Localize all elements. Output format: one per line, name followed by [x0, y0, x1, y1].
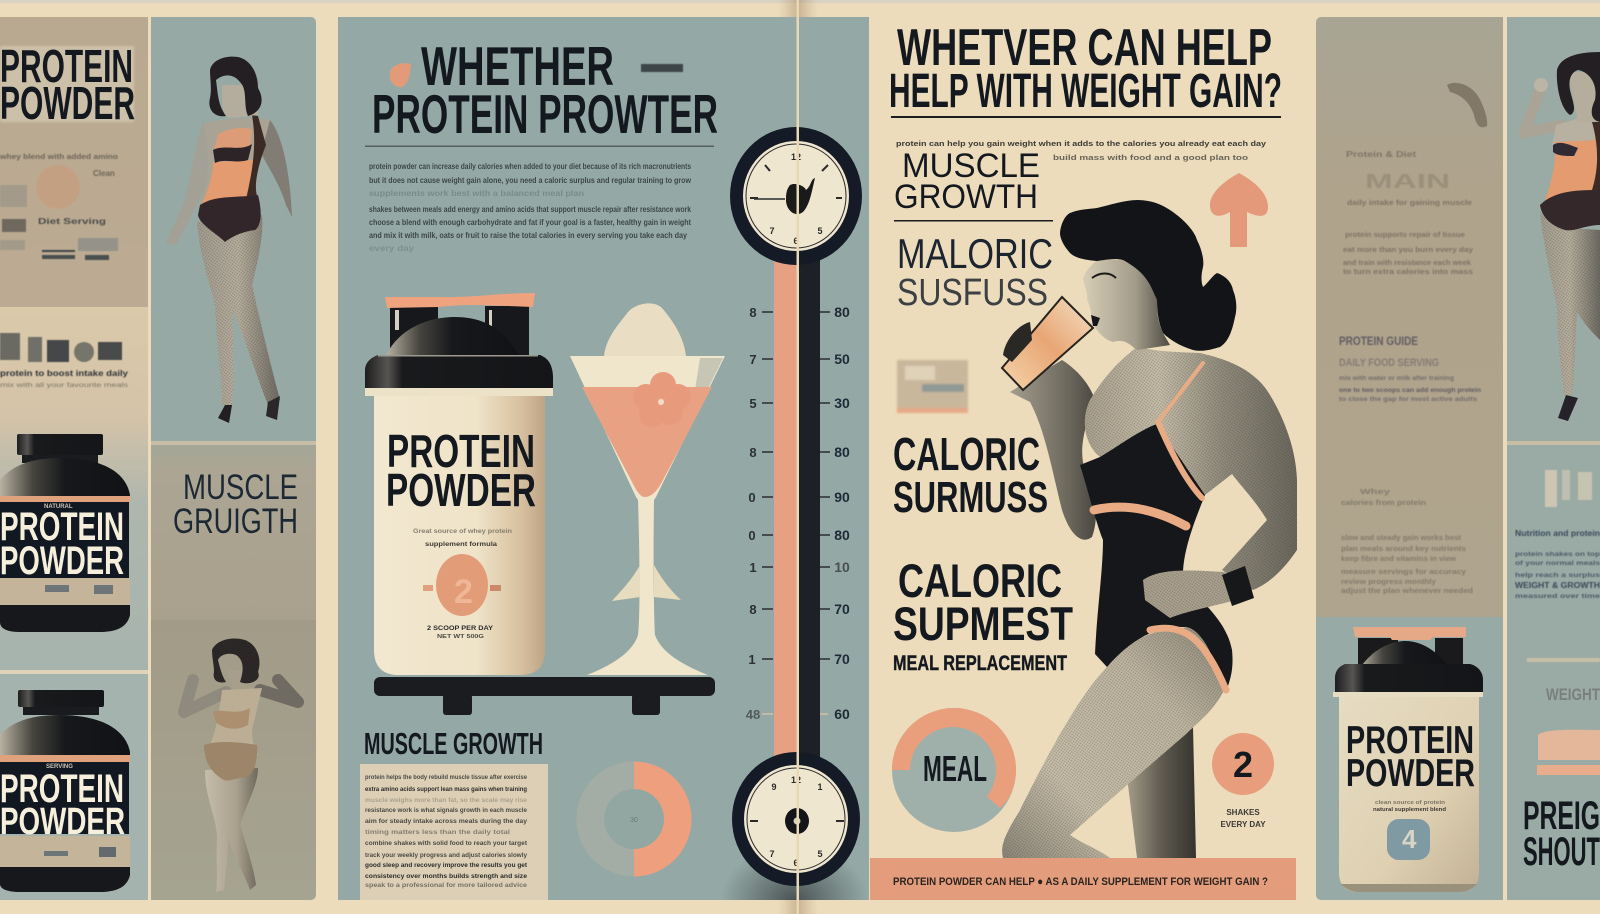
shaker label text: supplement formula: [425, 541, 497, 548]
arrow: weight up: [1210, 173, 1268, 247]
faded text block middle: PROTEIN GUIDE: [1339, 334, 1418, 348]
text block: muscle growth details: speak to a professional for more tailored advice: [365, 882, 527, 889]
panel: left product column: [0, 17, 148, 900]
faded text block lower: keep fibre and vitamins in view: [1341, 556, 1457, 563]
donut chart: 30: [630, 817, 638, 824]
shaker label text: 2 SCOOP PER DAY: [427, 625, 494, 632]
faded nutrition label details: Diet Serving: [38, 217, 106, 226]
icon: bottom clock dial: 9: [771, 782, 777, 792]
scale labels left: 8: [749, 602, 757, 617]
intro paragraph: but it does not cause weight gain alone, you need a caloric surplus and regular training to grow: [369, 176, 692, 185]
intro paragraph: and mix it with milk, oats or fruit to raise the total calories in every serving you take each day: [369, 231, 687, 240]
badge caption: SHAKES: [1226, 808, 1260, 817]
heading: muscle growth label: MUSCLE GROWTH: [364, 726, 543, 761]
faded text block: Nutrition and protein: [1515, 529, 1600, 538]
scale labels right: 70: [834, 601, 850, 617]
text block: muscle growth details: combine shakes with solid food to reach your target: [365, 840, 528, 847]
faded text block upper: protein supports repair of tissue: [1345, 232, 1465, 239]
icon: top clock dial: 7: [769, 226, 775, 236]
icon: protein shaker: [365, 293, 553, 675]
intro paragraph: supplements work best with a balanced meal plan: [369, 189, 584, 198]
text block: muscle growth details: consistency over months builds strength and size: [365, 873, 527, 880]
faded weighing scale: [1527, 658, 1600, 775]
number badge: [1212, 733, 1274, 795]
scale labels left: 7: [749, 352, 757, 367]
icon: faded food block: [897, 360, 968, 413]
swimsuit trim: [1094, 363, 1226, 690]
shelf: [374, 677, 715, 715]
heading: muscle growth: [894, 147, 1040, 216]
icon: protein jar 2: PROTEIN: [0, 767, 124, 811]
small shaker label: natural supplement blend: [1373, 807, 1446, 813]
heading: caloric surmuss: [893, 428, 1048, 522]
footer band: PROTEIN POWDER CAN HELP ● AS A DAILY SUPPLEMENT FOR WEIGHT GAIN ?: [893, 876, 1268, 888]
icon: bottom clock dial: 1: [817, 782, 823, 792]
faded nutrition label details: [0, 154, 118, 260]
faded text block: of your normal meals: [1515, 560, 1600, 567]
badge caption: [1220, 808, 1266, 829]
icon: top clock dial: [730, 127, 862, 265]
icon: top clock dial: 12: [791, 152, 801, 162]
centre fold: [778, 0, 818, 914]
heading: caloric surmuss: SURMUSS: [893, 473, 1048, 522]
faded text block: help reach a surplus: [1515, 572, 1600, 579]
text block: muscle growth details: [360, 764, 548, 900]
heading: caloric surmuss: CALORIC: [893, 428, 1040, 480]
arm raised: [1010, 360, 1096, 540]
faded text block: [1515, 470, 1600, 600]
faded icon row: protein to boost intake daily: [0, 369, 129, 378]
shaker label text: Great source of whey protein: [413, 528, 512, 535]
heading: muscle growth: MUSCLE: [902, 147, 1040, 185]
icon: protein jar 1: POWDER: [0, 539, 124, 583]
shaker badge: 2: [454, 573, 473, 611]
scale labels left: [746, 305, 760, 722]
shaker badge: [423, 554, 501, 616]
intro text: [896, 139, 1267, 162]
icon: bottom clock dial: 7: [769, 849, 775, 859]
text block: muscle growth details: protein helps the body rebuild muscle tissue after exercise: [365, 774, 527, 781]
scale labels left: 48: [746, 707, 760, 722]
small shaker label: [1346, 719, 1475, 813]
faded nutrition label details: whey blend with added amino: [0, 154, 118, 161]
shaker label text: POWDER: [386, 464, 536, 516]
faded text block upper: eat more than you burn every day: [1343, 247, 1473, 254]
swimsuit: [1080, 424, 1233, 692]
front thigh: [1002, 628, 1224, 858]
title: whether can help with weight gain: HELP WITH WEIGHT GAIN?: [889, 65, 1282, 118]
scale labels left: 1: [749, 560, 757, 575]
figure: woman drinking shake: [1002, 200, 1297, 858]
scale labels right: [834, 304, 850, 722]
faded text block middle: [1339, 334, 1481, 403]
scale labels right: 10: [834, 559, 850, 575]
icon: protein jar 1: PROTEIN: [0, 505, 124, 549]
figure: standing woman: [166, 57, 292, 423]
faded text block lower: slow and steady gain works best: [1341, 535, 1462, 542]
faded icon row: mix with all your favourite meals: [0, 383, 128, 389]
small shaker label: POWDER: [1346, 752, 1475, 795]
heading: protein powder: PROTEIN: [0, 40, 133, 92]
panel: right faded column: [1316, 17, 1503, 900]
intro paragraph: choose a blend with enough carbohydrate and fat if your goal is a faster, healthy gain in weight: [369, 218, 691, 227]
lips and eye: [1091, 274, 1116, 326]
scale labels right: 80: [834, 527, 850, 543]
shaker label text: [386, 425, 536, 640]
faded text block: WEIGHT & GROWTH: [1515, 581, 1600, 590]
flower: [633, 372, 691, 427]
chest and right arm: [1085, 347, 1297, 590]
faded text block upper: daily intake for gaining muscle: [1347, 200, 1472, 207]
back leg: [1127, 727, 1196, 858]
icon: top clock dial: 6: [793, 236, 799, 246]
faded text block lower: plan meals around key nutrients: [1341, 546, 1466, 553]
title: whether can help with weight gain: [889, 19, 1282, 118]
scale labels left: 0: [748, 528, 756, 543]
faded text block lower: measure servings for accuracy: [1341, 569, 1466, 576]
meal donut: MEAL: [923, 748, 987, 789]
intro paragraph: protein powder can increase daily calories when added to your diet because of its rich macronutrients: [369, 162, 691, 171]
faded text block upper: to turn extra calories into mass: [1343, 269, 1473, 276]
faded text block upper: and train with resistance each week: [1343, 260, 1471, 267]
hand on hip: [1143, 570, 1235, 618]
text block: muscle growth details: muscle weighs more than fat, so the scale may rise: [365, 797, 527, 804]
heading: caloric supmest: SUPMEST: [893, 597, 1073, 650]
text block: muscle growth details: track your weekly progress and adjust calories slowly: [365, 852, 527, 859]
icon: protein jar 2: [0, 690, 130, 892]
faded text block lower: [1341, 489, 1473, 595]
face: [1083, 260, 1170, 350]
icon: protein jar 2: POWDER: [0, 801, 125, 843]
text block: muscle growth details: timing matters less than the daily total: [365, 829, 510, 836]
faded text block lower: calories from protein: [1341, 500, 1426, 507]
scale labels right: 60: [834, 706, 850, 722]
intro paragraph: [369, 162, 692, 253]
scale labels left: 0: [748, 490, 756, 505]
text block: muscle growth details: extra amino acids support lean mass gains when training: [365, 786, 527, 793]
icon: bottom clock dial: 6: [793, 858, 799, 868]
donut chart: [576, 762, 692, 876]
scale labels right: 80: [834, 444, 850, 460]
text block: muscle growth details: good sleep and recovery improve the results you get: [365, 862, 528, 869]
title: whether protein prowter: [372, 35, 718, 145]
heading: muscle growth: MUSCLE: [183, 468, 298, 507]
text block: muscle growth details: resistance work is what signals growth in each muscle: [365, 807, 527, 814]
hair: [1060, 200, 1236, 351]
number badge: 2: [1233, 744, 1253, 785]
icon: protein jar 1: NATURAL: [44, 504, 73, 510]
small shaker badge: [1387, 819, 1430, 860]
icon: peach flourish: [390, 63, 411, 87]
intro text: protein can help you gain weight when it adds to the calories you already eat each day: [896, 139, 1267, 148]
shaker label text: PROTEIN: [387, 425, 535, 477]
scale labels right: 80: [834, 304, 850, 320]
panel: far right column: [1507, 17, 1600, 900]
faded text block upper: MAIN: [1365, 171, 1450, 193]
figure: flexing woman: [184, 638, 298, 892]
heading: protein powder: POWDER: [0, 77, 135, 129]
scale labels left: 8: [749, 305, 757, 320]
heading: muscle growth: GROWTH: [894, 178, 1038, 216]
small shaker label: PROTEIN: [1346, 719, 1474, 762]
scale labels left: 8: [749, 445, 757, 460]
title: whether protein prowter: WHETHER: [421, 35, 614, 97]
heading: preig shout: [1523, 794, 1600, 874]
faded icon row: [0, 333, 129, 389]
text block: muscle growth details: aim for steady intake across meals during the day: [365, 818, 527, 825]
icon: bottom clock dial: 5: [817, 849, 823, 859]
scale labels right: 50: [834, 351, 850, 367]
scale column thermometer: [746, 255, 850, 760]
icon: protein jar 2: SERVING: [46, 764, 73, 770]
title: whether can help with weight gain: WHETVER CAN HELP: [897, 19, 1272, 77]
heading: protein powder: [0, 40, 135, 129]
panel: figure column: [151, 17, 316, 900]
small shaker badge: 4: [1402, 824, 1417, 854]
faded text block middle: one to two scoops can add enough protein: [1339, 387, 1481, 394]
heading: caloric supmest: [893, 554, 1073, 650]
icon: protein jar 1: [0, 434, 130, 632]
faded text block: measured over time: [1515, 593, 1600, 600]
faded text block middle: DAILY FOOD SERVING: [1339, 357, 1439, 369]
icon: faded flexed arm: [1447, 83, 1487, 127]
scale labels right: 70: [834, 651, 850, 667]
icon: protein shaker small: [1333, 627, 1483, 892]
heading: muscle growth: [173, 468, 298, 541]
intro paragraph: every day: [369, 244, 415, 253]
faded text block upper: [1343, 150, 1473, 276]
label: meal replacement: MEAL REPLACEMENT: [893, 652, 1067, 675]
shake glass: [1002, 297, 1093, 390]
scale labels right: 30: [834, 395, 850, 411]
faded nutrition label details: Clean: [93, 169, 115, 178]
icon: bottom clock dial: [732, 752, 860, 886]
faded text block middle: to close the gap for most active adults: [1339, 396, 1477, 403]
faded text block lower: review progress monthly: [1341, 579, 1436, 586]
heading: caloric supmest: CALORIC: [898, 554, 1062, 607]
intro text: build mass with food and a good plan too: [1053, 153, 1249, 162]
heading: maloric susfuss: SUSFUSS: [897, 272, 1048, 314]
scale labels left: 1: [748, 652, 756, 667]
meal donut: [892, 708, 1016, 832]
icon: glass with powder: [570, 303, 725, 675]
heading: maloric susfuss: [897, 230, 1053, 314]
faded text block lower: Whey: [1360, 489, 1390, 496]
small shaker label: clean source of protein: [1375, 800, 1445, 806]
scale labels right: 90: [834, 489, 850, 505]
faded text block middle: mix with water or milk after training: [1339, 375, 1454, 382]
shaker label text: NET WT 500G: [437, 634, 484, 640]
badge caption: EVERY DAY: [1220, 820, 1266, 829]
wrist band: [1222, 566, 1254, 606]
intro paragraph: shakes between meals add energy and amino acids that support muscle repair after resistance work: [369, 205, 691, 214]
heading: maloric susfuss: MALORIC: [897, 230, 1053, 277]
figure: woman cropped: [1524, 52, 1600, 421]
heading: muscle growth: GRUIGTH: [173, 502, 298, 541]
title: whether protein prowter: PROTEIN PROWTER: [372, 83, 718, 145]
faded text block upper: Protein & Diet: [1346, 150, 1416, 159]
panel: cream poster: [869, 17, 1300, 900]
faded text block lower: adjust the plan whenever needed: [1341, 588, 1473, 595]
icon: top clock dial: 5: [817, 226, 823, 236]
footer band: [870, 858, 1296, 900]
panel: main teal poster: [338, 17, 869, 900]
scale labels left: 5: [749, 396, 757, 411]
icon: bottom clock dial: 12: [791, 775, 801, 785]
faded text block: protein shakes on top: [1515, 551, 1600, 558]
